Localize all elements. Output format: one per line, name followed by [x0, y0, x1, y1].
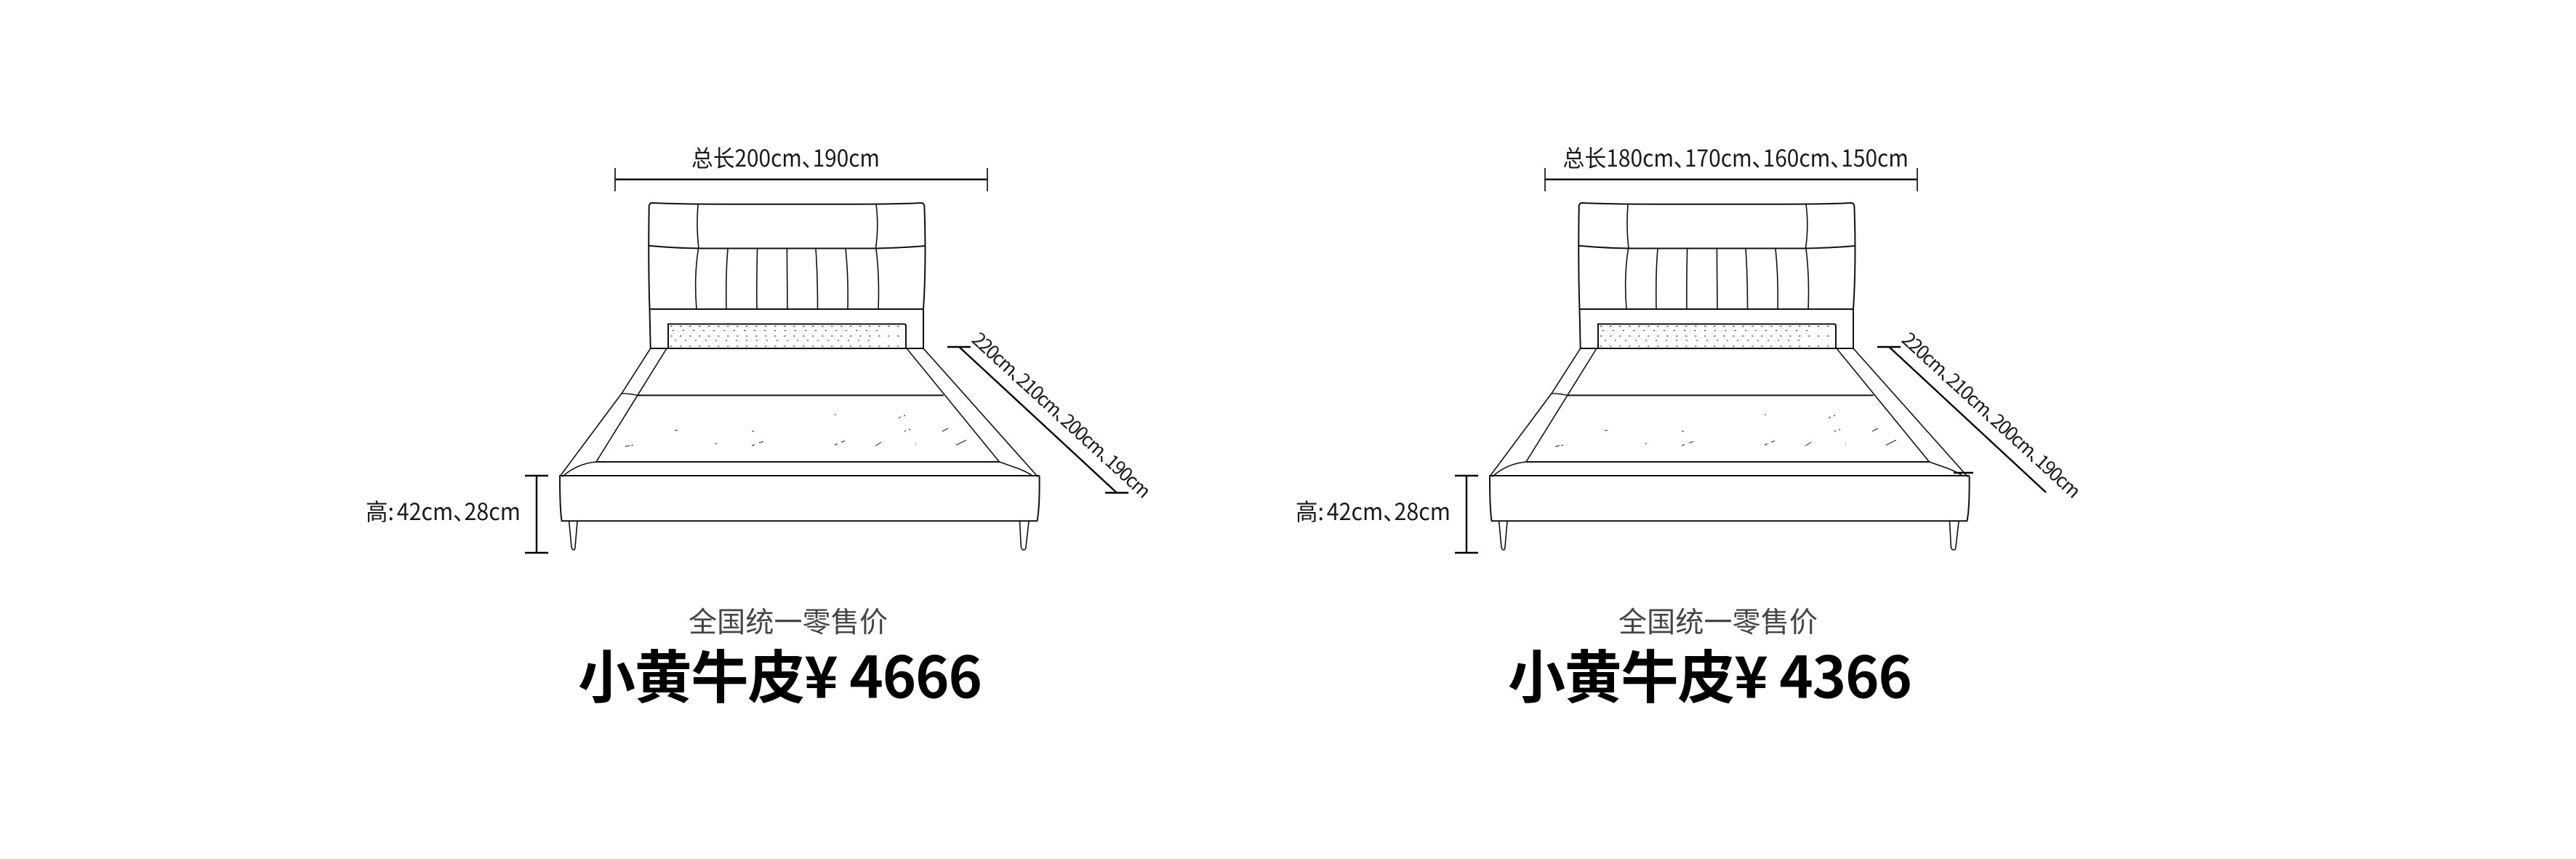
mattress speckles [1555, 415, 1896, 447]
height label: 高:42cm、28cm [366, 494, 521, 527]
width dimension line [615, 168, 987, 191]
width label: 总长200cm、190cm [691, 140, 880, 174]
price: 小黄牛皮¥ 4366 [1508, 631, 1912, 714]
mattress speckles [625, 415, 966, 447]
bed legs [569, 522, 1029, 550]
price: 小黄牛皮¥ 4666 [578, 631, 982, 714]
retail price caption: 全国统一零售价 [689, 600, 888, 641]
leather panel with speckle texture [1581, 324, 1853, 348]
length dimension line [947, 347, 1128, 493]
length label: 220cm、210cm、200cm、190cm [1897, 326, 2087, 503]
bed frame [560, 348, 1040, 521]
retail price caption: 全国统一零售价 [1618, 600, 1818, 641]
width dimension line [1545, 168, 1917, 191]
panel: bed 200/190cm [366, 140, 1157, 714]
height dimension line [525, 476, 548, 553]
height label: 高:42cm、28cm [1296, 494, 1450, 527]
panel: bed 180-150cm [1296, 140, 2087, 714]
length label: 220cm、210cm、200cm、190cm [967, 326, 1157, 503]
headboard [649, 203, 925, 348]
headboard [1578, 203, 1855, 348]
bed frame [1490, 348, 1970, 521]
leather panel with speckle texture [651, 324, 923, 348]
width label: 总长180cm、170cm、160cm、150cm [1563, 140, 1909, 174]
bed legs [1499, 522, 1959, 550]
length dimension line [1877, 347, 2046, 492]
height dimension line [1455, 476, 1478, 553]
